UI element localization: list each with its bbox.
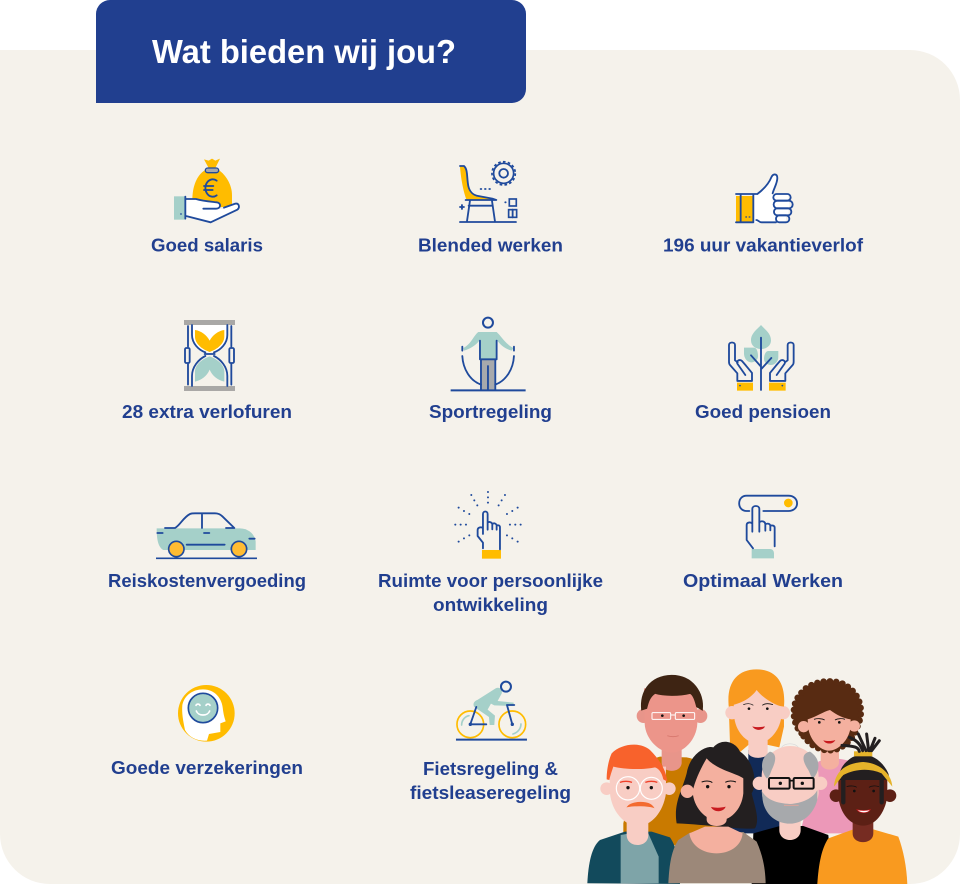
person: back blonde woman — [725, 669, 790, 833]
illustration: group of people — [587, 669, 907, 884]
icon: jump rope — [451, 318, 526, 390]
icon: switch with finger — [739, 496, 797, 558]
person: back curly woman — [794, 681, 867, 833]
person: front dark-haired woman — [668, 742, 766, 883]
labels — [108, 234, 864, 803]
label: Ruimte voor persoonlijke ontwikkeling — [378, 570, 603, 615]
label: Fietsregeling & fietsleaseregeling: fietsleaseregeling — [410, 782, 571, 803]
person: back left man — [623, 675, 730, 847]
label: Ruimte voor persoonlijke ontwikkeling: Ruimte voor persoonlijke — [378, 570, 603, 591]
label: Optimaal Werken: Optimaal Werken — [683, 570, 843, 591]
label: Goede verzekeringen: Goede verzekeringen — [111, 757, 303, 778]
label: 196 uur vakantieverlof: 196 uur vakantieverlof — [663, 234, 864, 256]
label: Fietsregeling & fietsleaseregeling — [410, 758, 571, 803]
icon: money bag on hand — [174, 159, 239, 223]
person: front bald man — [753, 744, 827, 840]
icon: chair and gear — [460, 162, 517, 222]
title banner — [96, 0, 526, 103]
label: Ruimte voor persoonlijke ontwikkeling: ontwikkeling — [433, 594, 548, 615]
icon: car — [156, 513, 257, 558]
label: 28 extra verlofuren: 28 extra verlofuren — [122, 401, 292, 422]
label: Goed salaris: Goed salaris — [151, 234, 263, 256]
icon: hands with plant — [729, 325, 794, 391]
icon: thumbs up — [736, 174, 793, 223]
icon: cyclist — [456, 682, 527, 740]
person: front redhead man — [587, 745, 680, 884]
label: Reiskostenvergoeding: Reiskostenvergoeding — [108, 570, 306, 591]
person: front woman with headband — [817, 734, 907, 884]
icon: hourglass — [184, 320, 235, 391]
icon: head with smiley — [178, 685, 235, 742]
label: Sportregeling: Sportregeling — [429, 401, 552, 422]
label: Goed pensioen: Goed pensioen — [695, 401, 831, 422]
label: Blended werken: Blended werken — [418, 234, 563, 256]
person: bald man shirt — [752, 826, 833, 884]
label: Fietsregeling & fietsleaseregeling: Fietsregeling & — [423, 758, 558, 779]
icon: hand with sparks — [454, 491, 522, 559]
title: Wat bieden wij jou? — [152, 33, 456, 70]
